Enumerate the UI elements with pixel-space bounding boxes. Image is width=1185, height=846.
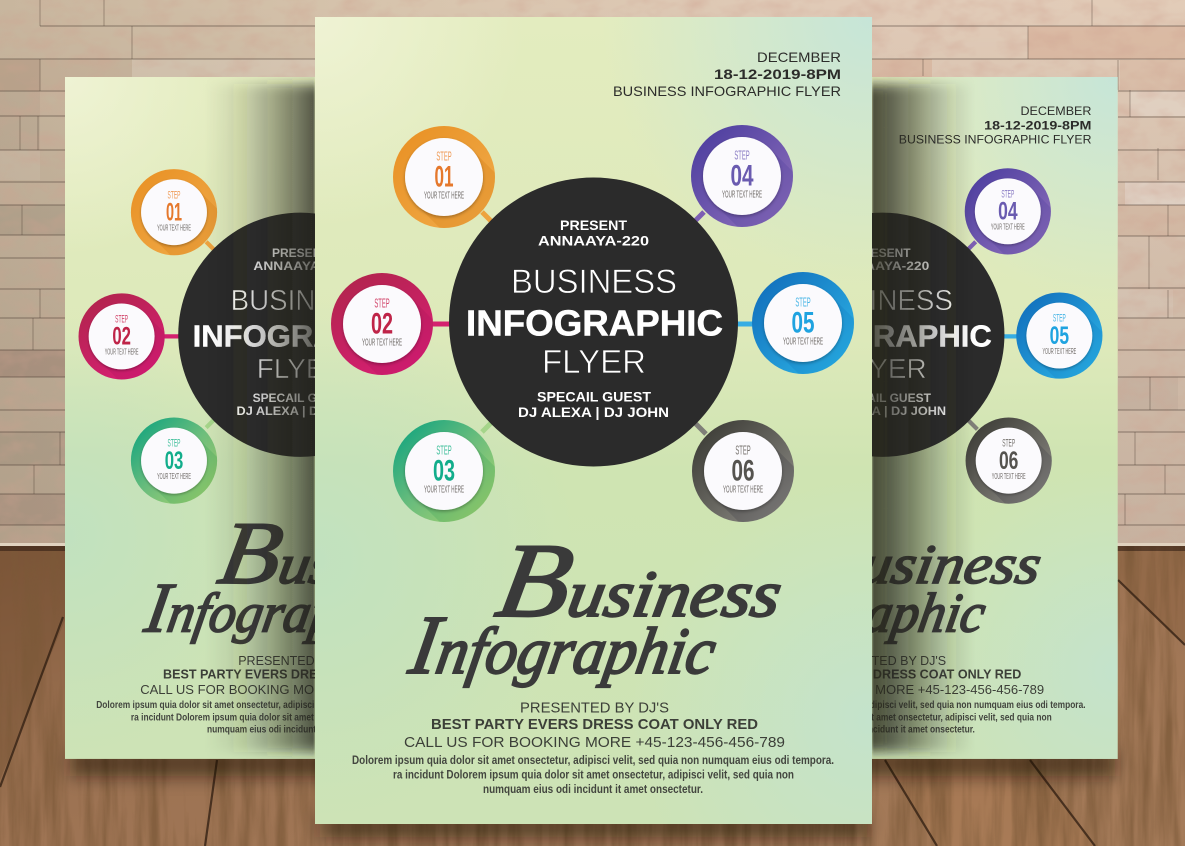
right flyer: step 04 badge: YOUR TEXT HERE xyxy=(991,222,1025,232)
left flyer xyxy=(65,77,315,759)
left flyer: details: CALL US FOR BOOKING MORE +45-123-456-456-789 xyxy=(140,683,462,697)
right flyer: step 05 badge: YOUR TEXT HERE xyxy=(1042,346,1076,356)
center flyer: script title: Business xyxy=(489,523,793,640)
left flyer: step 01 badge: STEP xyxy=(168,189,180,201)
right flyer: step 04 badge xyxy=(964,168,1051,254)
center flyer: step 04 badge: STEP xyxy=(734,148,750,162)
left flyer: details: BEST PARTY EVERS DRESS COAT ONLY RED xyxy=(163,668,439,682)
right flyer: step 06 badge xyxy=(966,418,1052,504)
right flyer: circle heading: PRESENT xyxy=(854,246,911,260)
left flyer: step 03 badge: 03 xyxy=(165,447,183,475)
right flyer: date header: 18-12-2019-8PM xyxy=(984,118,1092,132)
center flyer: date header xyxy=(613,49,841,99)
left flyer: script title: Infographic xyxy=(139,569,411,647)
left flyer: step 03 badge: STEP xyxy=(168,438,180,450)
left flyer: script title xyxy=(141,524,315,644)
right flyer: script title xyxy=(872,545,1042,644)
right flyer: circle heading: BUSINESS xyxy=(813,285,953,317)
right flyer: step 05 badge: 05 xyxy=(1050,322,1069,350)
left flyer: step 02 badge: STEP xyxy=(115,313,128,325)
left flyer: step 01 badge: 01 xyxy=(166,198,182,226)
center flyer: step 05 badge: YOUR TEXT HERE xyxy=(783,337,823,348)
center flyer: step 02 badge: YOUR TEXT HERE xyxy=(362,338,402,349)
right flyer: script title: Infographic xyxy=(721,569,993,647)
left flyer: SPECAIL GUEST xyxy=(253,391,350,405)
left flyer: step 01 badge: YOUR TEXT HERE xyxy=(157,223,191,233)
left flyer: circle heading: INFOGRAPHIC xyxy=(193,319,410,353)
center flyer: step 06 badge: 06 xyxy=(732,455,754,488)
center flyer: circle heading xyxy=(466,217,723,420)
right flyer: details: numquam eius odi incidunt it amet onsectetur. xyxy=(789,725,975,736)
left flyer: DJ ALEXA | DJ JOHN xyxy=(237,404,364,418)
center flyer: central dark circle xyxy=(449,178,738,466)
left flyer: details: PRESENTED BY DJ'S xyxy=(238,654,364,668)
center flyer: step 04 badge xyxy=(691,125,793,227)
left flyer: details: Dolorem ipsum quia dolor sit amet onsectetur, adipisci velit, sed quia non numquam eius odi tempora. xyxy=(96,700,504,711)
left flyer: step 03 badge xyxy=(130,418,218,504)
left flyer: circle heading: FLYER xyxy=(257,353,345,384)
left flyer: step 01 badge xyxy=(130,169,218,256)
center flyer: step 03 badge: 03 xyxy=(433,455,455,488)
right flyer: step 06 badge: 06 xyxy=(999,447,1018,475)
center flyer: circle heading: FLYER xyxy=(542,343,646,380)
center flyer: circle heading: INFOGRAPHIC xyxy=(466,303,723,344)
right flyer: details: BEST PARTY EVERS DRESS COAT ONLY RED xyxy=(745,668,1021,682)
right flyer: details: PRESENTED BY DJ'S xyxy=(820,654,946,668)
center flyer: step 05 badge xyxy=(752,272,854,374)
right flyer: circle heading xyxy=(872,248,992,378)
center flyer: circle heading: ANNAAYA-220 xyxy=(538,233,649,249)
center flyer: circle heading: DJ ALEXA | DJ JOHN xyxy=(518,404,669,420)
center flyer: step 04 badge: 04 xyxy=(730,160,754,193)
center flyer: details: Dolorem ipsum quia dolor sit amet onsectetur, adipisci velit, sed quia non numquam eius odi tempora. xyxy=(352,755,834,767)
right flyer: SPECAIL GUEST xyxy=(835,391,932,405)
center flyer: step 02 badge: STEP xyxy=(374,296,390,310)
right flyer: step 05 badge xyxy=(1016,292,1102,379)
center flyer: date header: BUSINESS INFOGRAPHIC FLYER xyxy=(613,83,841,99)
right flyer: details: Dolorem ipsum quia dolor sit amet onsectetur, adipisci velit, sed quia non numquam eius odi tempora. xyxy=(678,700,1086,711)
center flyer: step 01 badge xyxy=(393,126,495,228)
right flyer: details: CALL US FOR BOOKING MORE +45-123-456-456-789 xyxy=(722,683,1044,697)
center flyer: step 06 badge xyxy=(692,420,794,522)
right flyer: step 04 badge: STEP xyxy=(1001,188,1014,200)
right flyer: step 05 badge: STEP xyxy=(1053,313,1066,325)
left flyer: details: numquam eius odi incidunt it amet onsectetur. xyxy=(207,725,393,736)
center flyer: details: CALL US FOR BOOKING MORE +45-123-456-456-789 xyxy=(404,734,785,751)
center flyer: step 01 badge: 01 xyxy=(434,161,454,194)
center flyer: details: BEST PARTY EVERS DRESS COAT ONLY RED xyxy=(431,716,758,733)
center flyer: step 02 badge xyxy=(331,273,433,375)
right flyer: circle heading: INFOGRAPHIC xyxy=(775,319,992,353)
center flyer: date header: DECEMBER xyxy=(757,49,841,65)
wood plank floor xyxy=(0,543,1185,846)
center flyer: step 03 badge xyxy=(393,420,495,522)
right flyer: step 06 badge: YOUR TEXT HERE xyxy=(992,471,1026,481)
left flyer: circle heading: ANNAAYA-220 xyxy=(253,259,348,273)
left flyer: step 02 badge: 02 xyxy=(112,323,131,351)
center flyer: details: numquam eius odi incidunt it amet onsectetur. xyxy=(483,784,703,796)
center flyer: script title: Infographic xyxy=(403,600,724,692)
center flyer: details: ra incidunt Dolorem ipsum quia dolor sit amet onsectetur, adipisci velit, sed quia non xyxy=(393,770,794,782)
left flyer: step 02 badge: YOUR TEXT HERE xyxy=(105,347,139,357)
right flyer: script title: Business xyxy=(794,504,1051,603)
center flyer: step 04 badge: YOUR TEXT HERE xyxy=(722,190,762,201)
center flyer: details: PRESENTED BY DJ'S xyxy=(520,700,669,717)
center flyer: step 03 badge: YOUR TEXT HERE xyxy=(424,485,464,496)
center flyer: script title xyxy=(403,523,793,692)
right flyer: details xyxy=(872,656,1085,732)
left flyer: step 03 badge: YOUR TEXT HERE xyxy=(157,471,191,481)
flyer drop shadows on the floor xyxy=(70,750,1115,837)
center flyer: circle heading: PRESENT xyxy=(560,217,627,233)
center flyer: step 03 badge: STEP xyxy=(436,442,452,458)
center flyer: step 06 badge: YOUR TEXT HERE xyxy=(723,485,763,496)
center flyer: circle heading: BUSINESS xyxy=(511,263,677,301)
center flyer: step 06 badge: STEP xyxy=(735,442,751,458)
right flyer: date header: BUSINESS INFOGRAPHIC FLYER xyxy=(899,133,1091,147)
center flyer: connector lines xyxy=(428,212,758,434)
right flyer: DJ ALEXA | DJ JOHN xyxy=(819,404,946,418)
center flyer: date header: 18-12-2019-8PM xyxy=(714,66,841,82)
left flyer: script title: Business xyxy=(212,504,469,603)
left flyer: details xyxy=(96,656,315,734)
stone brick wall background xyxy=(0,0,1185,546)
left flyer: details: ra incidunt Dolorem ipsum quia dolor sit amet onsectetur, adipisci velit, sed quia non xyxy=(131,712,470,723)
left flyer: circle heading xyxy=(194,248,315,378)
center flyer xyxy=(315,17,885,824)
center flyer: step 05 badge: 05 xyxy=(792,307,814,340)
center flyer: step 02 badge: 02 xyxy=(371,308,393,341)
right flyer: date header xyxy=(900,106,1091,144)
right flyer: date header: DECEMBER xyxy=(1020,104,1091,118)
right flyer: circle heading: ANNAAYA-220 xyxy=(835,259,930,273)
left flyer: step 02 badge xyxy=(78,293,165,380)
right flyer xyxy=(872,77,1118,759)
center flyer: step 01 badge: STEP xyxy=(436,148,452,164)
right flyer: circle heading: FLYER xyxy=(839,353,927,384)
left flyer: circle heading: PRESENT xyxy=(272,246,329,260)
left flyer: circle heading: BUSINESS xyxy=(231,285,371,317)
right flyer: step 04 badge: 04 xyxy=(998,198,1018,226)
center flyer: step 01 badge: YOUR TEXT HERE xyxy=(424,191,464,202)
center flyer: circle heading: SPECAIL GUEST xyxy=(537,389,651,405)
right flyer: step 06 badge: STEP xyxy=(1002,438,1015,450)
center flyer: details xyxy=(352,700,834,796)
right flyer: details: ra incidunt Dolorem ipsum quia dolor sit amet onsectetur, adipisci velit, sed quia non xyxy=(713,712,1052,723)
center flyer: step 05 badge: STEP xyxy=(795,294,811,310)
